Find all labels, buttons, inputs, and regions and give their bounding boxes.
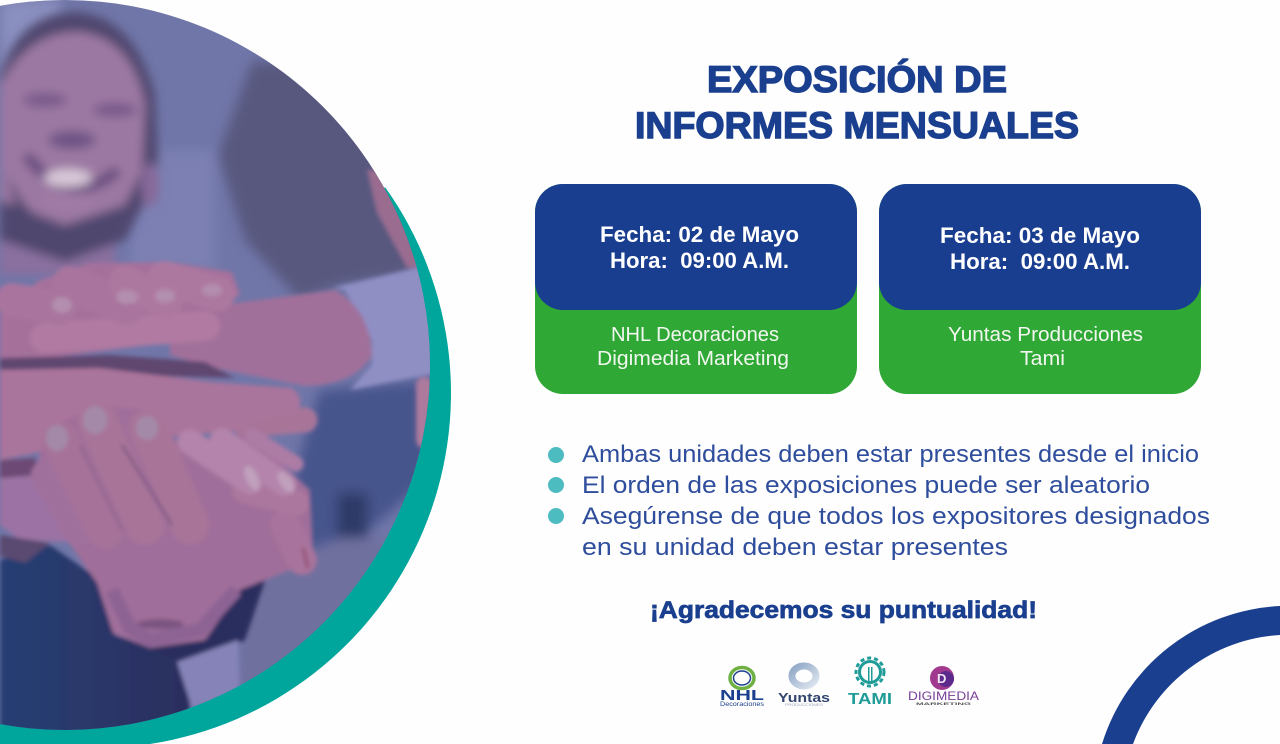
panel: schedule 03 de Mayo: Fecha: 03 de Mayo bbox=[940, 223, 1140, 248]
logo: NHL Decoraciones bbox=[720, 668, 764, 708]
panel: schedule 03 de Mayo: Tami bbox=[1020, 348, 1065, 370]
photo: team hands stacked bbox=[0, 0, 440, 735]
top hand base bbox=[0, 262, 240, 362]
logo: TAMI: TAMI bbox=[848, 691, 892, 708]
closing message: ¡Agradecemos su puntualidad! bbox=[650, 597, 1037, 624]
logo: Digimedia Marketing: DIGIMEDIA bbox=[908, 689, 979, 703]
panel: schedule 03 de Mayo: Yuntas Producciones bbox=[948, 324, 1143, 346]
upper arm bbox=[170, 290, 372, 386]
blurred man's face bbox=[0, 12, 159, 275]
main title: EXPOSICIÓN DE bbox=[707, 58, 1007, 100]
logo: Yuntas bbox=[778, 666, 830, 707]
panel: schedule 02 de Mayo: NHL Decoraciones bbox=[611, 324, 779, 346]
logo: Yuntas: PRODUCCIONES bbox=[785, 703, 824, 707]
logo: NHL Decoraciones: NHL bbox=[720, 687, 764, 704]
left forearm and watch bbox=[0, 475, 70, 542]
panel: schedule 02 de Mayo bbox=[535, 184, 857, 394]
middle hand bbox=[245, 420, 305, 425]
logo: Digimedia Marketing bbox=[908, 666, 979, 706]
bullet list of instructions: en su unidad deben estar presentes bbox=[582, 534, 1008, 561]
teal circle accent bbox=[0, 187, 451, 744]
logo: NHL Decoraciones: Decoraciones bbox=[720, 702, 764, 708]
pink edge behind cuff bbox=[367, 170, 440, 268]
dark clothing bbox=[0, 545, 190, 735]
main title: INFORMES MENSUALES bbox=[635, 105, 1079, 146]
shadow between hands bbox=[0, 355, 235, 378]
paler fingers bbox=[285, 525, 302, 560]
logo: Digimedia Marketing: D bbox=[937, 671, 946, 686]
panel: schedule 02 de Mayo: Hora: 09:00 A.M. bbox=[610, 248, 789, 273]
decorative blue arc corner bbox=[1102, 606, 1280, 744]
logo: TAMI bbox=[848, 658, 892, 708]
top hand fingers bbox=[12, 300, 60, 308]
bullet list of instructions bbox=[548, 441, 1210, 561]
panel: schedule 02 de Mayo: Fecha: 02 de Mayo bbox=[600, 222, 799, 247]
panel: schedule 03 de Mayo: Hora: 09:00 A.M. bbox=[950, 249, 1130, 274]
lower hand fingers bbox=[29, 464, 38, 478]
panel: schedule 03 de Mayo bbox=[879, 184, 1201, 394]
shirt cuff bbox=[335, 265, 430, 392]
white sleeve bbox=[177, 640, 240, 708]
bullet list of instructions: Ambas unidades deben estar presentes desde el inicio bbox=[582, 441, 1199, 468]
lower hands base bbox=[35, 405, 314, 648]
main title bbox=[635, 58, 1079, 146]
logo: Yuntas: Yuntas bbox=[778, 690, 830, 705]
bullet list of instructions: Asegúrense de que todos los expositores designados bbox=[582, 503, 1210, 530]
upper left fingers bbox=[45, 326, 205, 338]
logo: Digimedia Marketing: MARKETING bbox=[916, 701, 971, 706]
bullet list of instructions: El orden de las exposiciones puede ser aleatorio bbox=[582, 472, 1150, 499]
panel: schedule 02 de Mayo: Digimedia Marketing bbox=[597, 348, 789, 370]
